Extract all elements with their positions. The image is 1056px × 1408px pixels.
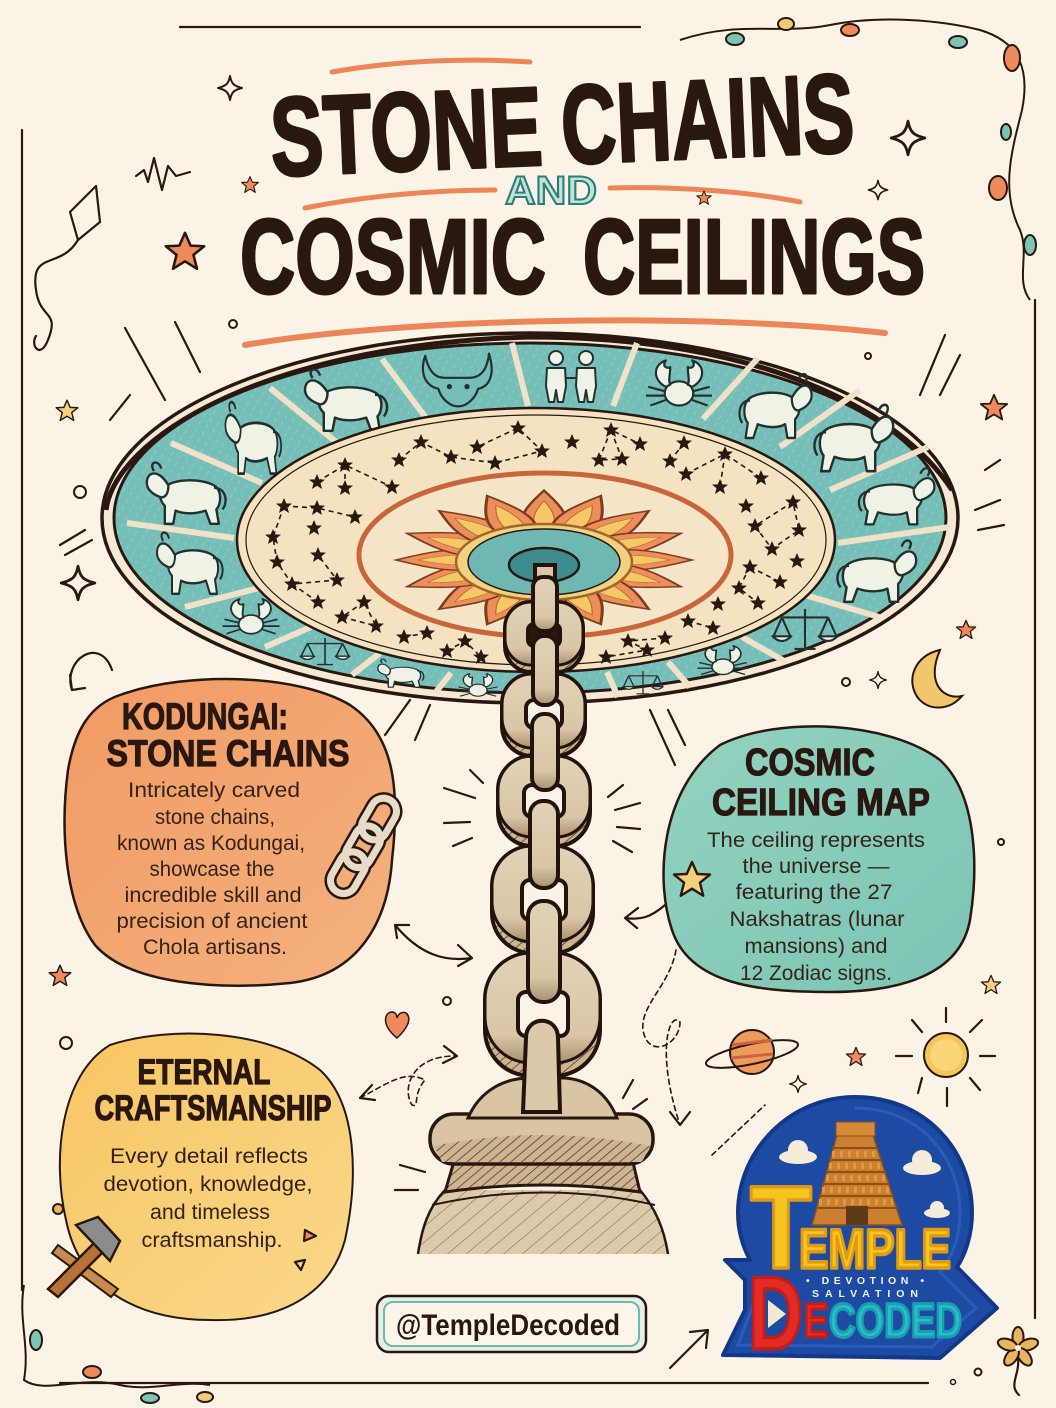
Cosmic ceiling description: Nakshatras (lunar [730, 908, 905, 931]
Kodungai description: Chola artisans. [143, 936, 287, 959]
Cosmic ceiling description: The ceiling represents [707, 829, 925, 852]
corner vines: bottom left [22, 1285, 213, 1403]
tower [812, 1122, 902, 1225]
title accent strokes [245, 60, 885, 345]
clouds [779, 1140, 950, 1218]
Stone chains heading: STONE CHAINS [106, 733, 350, 774]
teal blob [664, 726, 974, 992]
icon: ringed planet [704, 1030, 800, 1074]
panel: Kodungai stone chains [65, 679, 401, 986]
panel: cosmic ceiling map [664, 726, 974, 992]
zodiac band [114, 343, 946, 693]
craftsmanship description: Every detail reflects [110, 1145, 308, 1168]
band dividers [127, 343, 950, 697]
Cosmic ceiling description: the universe — [742, 855, 890, 878]
Kodungai description: incredible skill and [124, 884, 302, 907]
corner vines: top right [680, 18, 1036, 300]
craftsmanship description: and timeless [150, 1201, 270, 1224]
sun flower petals [396, 490, 692, 630]
Kodungai heading: KODUNGAI: [122, 696, 288, 737]
ceiling motion lines [60, 322, 1004, 765]
chain emphasis ticks [395, 770, 647, 1190]
logo: Temple Decoded [723, 1097, 997, 1372]
title line one: STONE [268, 64, 545, 200]
Eternal heading: ETERNAL [138, 1053, 270, 1092]
logo word Temple [750, 1162, 951, 1294]
arrows [70, 653, 765, 1368]
arrow: curved top left [70, 653, 112, 690]
panel: eternal craftsmanship [48, 1034, 353, 1320]
ring links [485, 602, 600, 1076]
Kodungai description: known as Kodungai, [117, 832, 305, 855]
Kodungai description: stone chains, [155, 806, 275, 829]
Cosmic heading: COSMIC [745, 742, 875, 784]
Ceiling map heading: CEILING MAP [712, 782, 930, 824]
logo word Decoded: D [748, 1256, 803, 1372]
Kodungai description: showcase the [150, 858, 274, 881]
upright links [523, 565, 560, 1112]
Cosmic ceiling description [707, 829, 925, 985]
title line one [268, 51, 856, 200]
icon: hammer [48, 1204, 120, 1297]
stone chain and pedestal [418, 565, 668, 1254]
logo tagline devotion: • DEVOTION • [806, 1275, 924, 1287]
rim shading [106, 337, 952, 510]
arrow: Kodungai to chain [395, 925, 472, 966]
kite doodle [34, 186, 100, 350]
yellow blob [60, 1034, 353, 1320]
arrow: ceiling map to chain [625, 905, 665, 928]
ceiling disc [102, 333, 958, 703]
zodiac figures [147, 351, 934, 696]
title word and: AND [505, 169, 597, 213]
Cosmic ceiling description: mansions) and [744, 935, 888, 958]
orange ring [359, 473, 731, 637]
Craftsmanship heading: CRAFTSMANSHIP [94, 1089, 332, 1128]
icon: sun [896, 1008, 995, 1106]
logo word Decoded [748, 1256, 962, 1372]
handle text: @TempleDecoded [396, 1309, 620, 1342]
badge shape [723, 1097, 997, 1358]
title [240, 51, 925, 345]
arrow: toward logo [670, 1330, 708, 1368]
constellations [265, 420, 807, 664]
inner cream field [237, 408, 835, 672]
pedestal [418, 1078, 668, 1254]
orange blob [65, 679, 395, 986]
craftsmanship description: devotion, knowledge, [104, 1173, 312, 1196]
craftsmanship description: craftsmanship. [142, 1229, 282, 1252]
logo word Temple: T [750, 1162, 812, 1294]
bull head [423, 354, 492, 406]
Kodungai description: precision of ancient [116, 910, 308, 933]
logo tagline salvation: SALVATION [812, 1288, 918, 1300]
central medallion [456, 524, 632, 600]
logo word Decoded: E [804, 1295, 828, 1348]
handle pill [377, 1296, 646, 1352]
icon: flower [950, 1327, 1040, 1395]
logo word Decoded: CODED [829, 1295, 962, 1348]
icon: crescent moon [912, 650, 962, 708]
Kodungai description: Intricately carved [128, 779, 300, 802]
title line two: COSMIC [240, 198, 546, 316]
icon: heart [386, 1012, 409, 1038]
craftsmanship description [104, 1145, 312, 1252]
arrow: dashed to panel [443, 1046, 457, 1063]
small sparkle and star doodles [49, 76, 1007, 1092]
icon: yellow star [674, 862, 710, 896]
twins [546, 351, 596, 402]
title line one: CHAINS [559, 51, 856, 188]
Cosmic ceiling description: 12 Zodiac signs. [740, 962, 892, 985]
logo word Temple: EMPLE [799, 1217, 951, 1280]
outer rim [102, 333, 958, 703]
Cosmic ceiling description: featuring the 27 [736, 881, 892, 904]
title line two [240, 198, 925, 316]
decorative sparkles [295, 1230, 316, 1270]
chain mount [509, 548, 579, 582]
arrow: dashed teal panel [643, 950, 680, 1125]
icon: chain links [326, 793, 401, 898]
Kodungai description [116, 779, 308, 959]
